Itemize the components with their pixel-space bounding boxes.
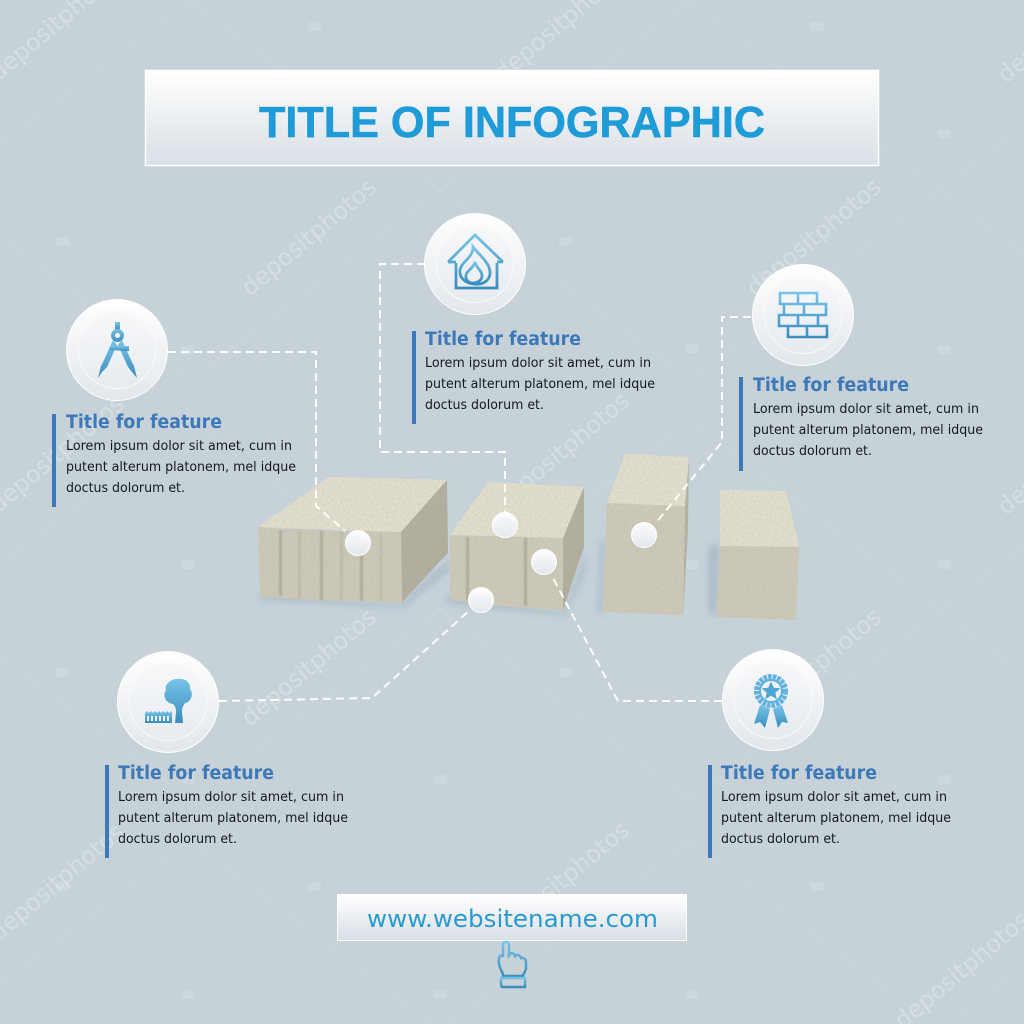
text block	[708, 763, 951, 858]
block 3	[603, 454, 689, 615]
text block: putent alterum platonem, mel idque	[66, 460, 296, 475]
icon disc	[424, 214, 526, 314]
text block: doctus dolorum et.	[425, 398, 544, 413]
text block: Title for feature	[753, 375, 909, 396]
text block: doctus dolorum et.	[753, 444, 872, 459]
text block: putent alterum platonem, mel idque	[425, 377, 655, 392]
feature: brick wall	[739, 264, 983, 471]
icon disc	[66, 300, 168, 400]
text block: Lorem ipsum dolor sit amet, cum in	[425, 356, 651, 371]
website banner	[338, 894, 686, 940]
icon disc	[722, 650, 824, 750]
text: depositphotos	[489, 816, 635, 945]
feature: award rosette	[708, 650, 951, 858]
text block: Title for feature	[425, 329, 581, 350]
text block: Lorem ipsum dolor sit amet, cum in	[118, 790, 344, 805]
connector lines	[168, 264, 751, 701]
icon: tree and fence	[145, 679, 192, 723]
icon: house with flame	[448, 235, 503, 288]
text block	[52, 412, 296, 507]
text block: putent alterum platonem, mel idque	[753, 423, 983, 438]
text block: Lorem ipsum dolor sit amet, cum in	[721, 790, 947, 805]
aerated concrete blocks	[258, 454, 799, 620]
block shadows	[258, 540, 720, 618]
block 2	[450, 482, 584, 610]
text: depositphotos	[236, 173, 382, 302]
block 4	[717, 490, 799, 620]
text block: Title for feature	[721, 763, 877, 784]
text block: putent alterum platonem, mel idque	[721, 811, 951, 826]
text block: putent alterum platonem, mel idque	[118, 811, 348, 826]
text: depositphotos	[741, 173, 887, 302]
text block: Title for feature	[118, 763, 274, 784]
icon disc	[118, 652, 218, 752]
text block: Title for feature	[66, 412, 222, 433]
icon: pointing hand	[499, 942, 526, 987]
text block	[412, 329, 655, 424]
text block	[739, 375, 983, 471]
text block: doctus dolorum et.	[721, 832, 840, 847]
block 1	[258, 477, 448, 602]
icon: brick wall	[779, 293, 827, 337]
text block: Lorem ipsum dolor sit amet, cum in	[66, 439, 292, 454]
icon: compass	[98, 322, 137, 378]
feature: fire house	[412, 214, 655, 424]
connector dots	[346, 512, 656, 612]
text block: doctus dolorum et.	[66, 481, 185, 496]
icon: award rosette	[754, 677, 788, 728]
title banner	[146, 70, 878, 166]
icon disc	[752, 264, 854, 366]
title: TITLE OF INFOGRAPHIC	[259, 98, 765, 147]
website banner: www.websitename.com	[367, 905, 658, 933]
feature: compass	[52, 300, 296, 507]
text block	[105, 763, 348, 858]
text: depositphotos	[236, 603, 382, 732]
feature: tree and fence	[105, 652, 348, 858]
text block: Lorem ipsum dolor sit amet, cum in	[753, 402, 979, 417]
text block: doctus dolorum et.	[118, 832, 237, 847]
text: depositphotos	[741, 603, 887, 732]
text: depositphotos	[489, 387, 635, 516]
